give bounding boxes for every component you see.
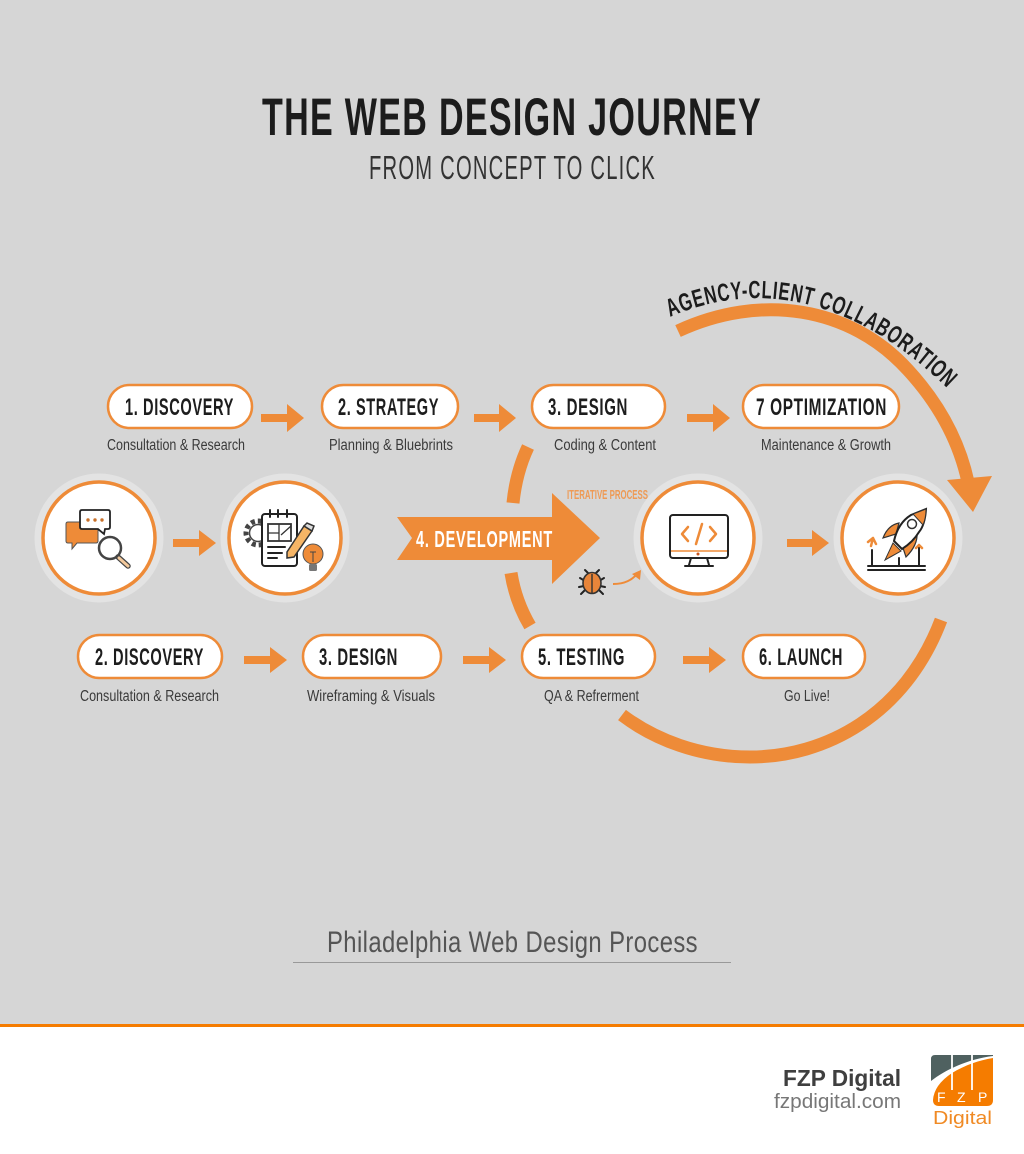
- step pill: 1 discovery: 1. DISCOVERY: [125, 394, 234, 421]
- iterative loop arc top: [513, 447, 528, 503]
- collaboration arc arrow: [678, 310, 992, 512]
- step pill: 6 launch: 6. LAUNCH: [759, 644, 843, 671]
- title: THE WEB DESIGN JOURNEY: [262, 88, 762, 147]
- step pill: 2 strategy: Planning & Bluebrints: [329, 437, 453, 454]
- brand name: FZP Digital: [783, 1065, 901, 1091]
- small arrow from bug: [613, 570, 641, 584]
- bottom feedback arc: [622, 620, 941, 757]
- step pill: 7 optimization: [743, 385, 899, 454]
- iterative process label: ITERATIVE PROCESS: [567, 488, 648, 502]
- circle icon: rocket launch: [834, 474, 962, 602]
- logo: [931, 1055, 993, 1128]
- arrow: [463, 647, 506, 673]
- arrow: [683, 647, 726, 673]
- development arrow: 4. DEVELOPMENT: [416, 526, 553, 552]
- step pill: 1 discovery: [107, 385, 252, 454]
- step pill: 3 design: 3. DESIGN: [319, 644, 398, 671]
- curved label: agency-client collaboration: AGENCY-CLIENT COLLABORATION: [668, 280, 958, 388]
- step pill: 6 launch: Go Live!: [784, 688, 830, 705]
- step pill: 2 strategy: [322, 385, 458, 454]
- step pill: 3 design: Coding & Content: [554, 437, 657, 454]
- circle icon: consultation and search: [34, 474, 164, 602]
- circle icon: code monitor: [634, 474, 762, 602]
- step pill: 5 testing: 5. TESTING: [538, 644, 625, 671]
- arrow: [687, 404, 730, 432]
- step pill: 3 design: 3. DESIGN: [548, 394, 628, 421]
- brand url: fzpdigital.com: [774, 1091, 901, 1113]
- icon: bug: [579, 570, 605, 594]
- caption: Philadelphia Web Design Process: [327, 926, 698, 959]
- step pill: 2 strategy: 2. STRATEGY: [338, 394, 439, 421]
- step pill: 2 discovery: [78, 635, 222, 705]
- arrow: [173, 530, 216, 556]
- step pill: 3 design: Wireframing & Visuals: [307, 688, 435, 705]
- footer: [0, 1024, 1024, 1154]
- step pill: 6 launch: [743, 635, 865, 705]
- arrow: [244, 647, 287, 673]
- step pill: 3 design: [532, 385, 665, 454]
- step pill: 2 discovery: Consultation & Research: [80, 688, 219, 705]
- iterative loop arc bottom: [511, 573, 530, 626]
- subtitle: FROM CONCEPT TO CLICK: [369, 149, 656, 186]
- circle icon: planning notebook: [220, 474, 350, 602]
- arrow: [787, 530, 829, 556]
- logo: FZP: [937, 1089, 987, 1105]
- step pill: 7 optimization: 7 OPTIMIZATION: [756, 394, 887, 421]
- step pill: 1 discovery: Consultation & Research: [107, 437, 245, 454]
- arrow: [261, 404, 304, 432]
- arrow: [474, 404, 516, 432]
- logo: Digital: [933, 1107, 992, 1128]
- step pill: 2 discovery: 2. DISCOVERY: [95, 644, 204, 671]
- step pill: 5 testing: QA & Refrerment: [544, 688, 640, 705]
- development arrow: [397, 493, 600, 584]
- step pill: 5 testing: [522, 635, 655, 705]
- step pill: 7 optimization: Maintenance & Growth: [761, 437, 891, 454]
- step pill: 3 design: [303, 635, 441, 705]
